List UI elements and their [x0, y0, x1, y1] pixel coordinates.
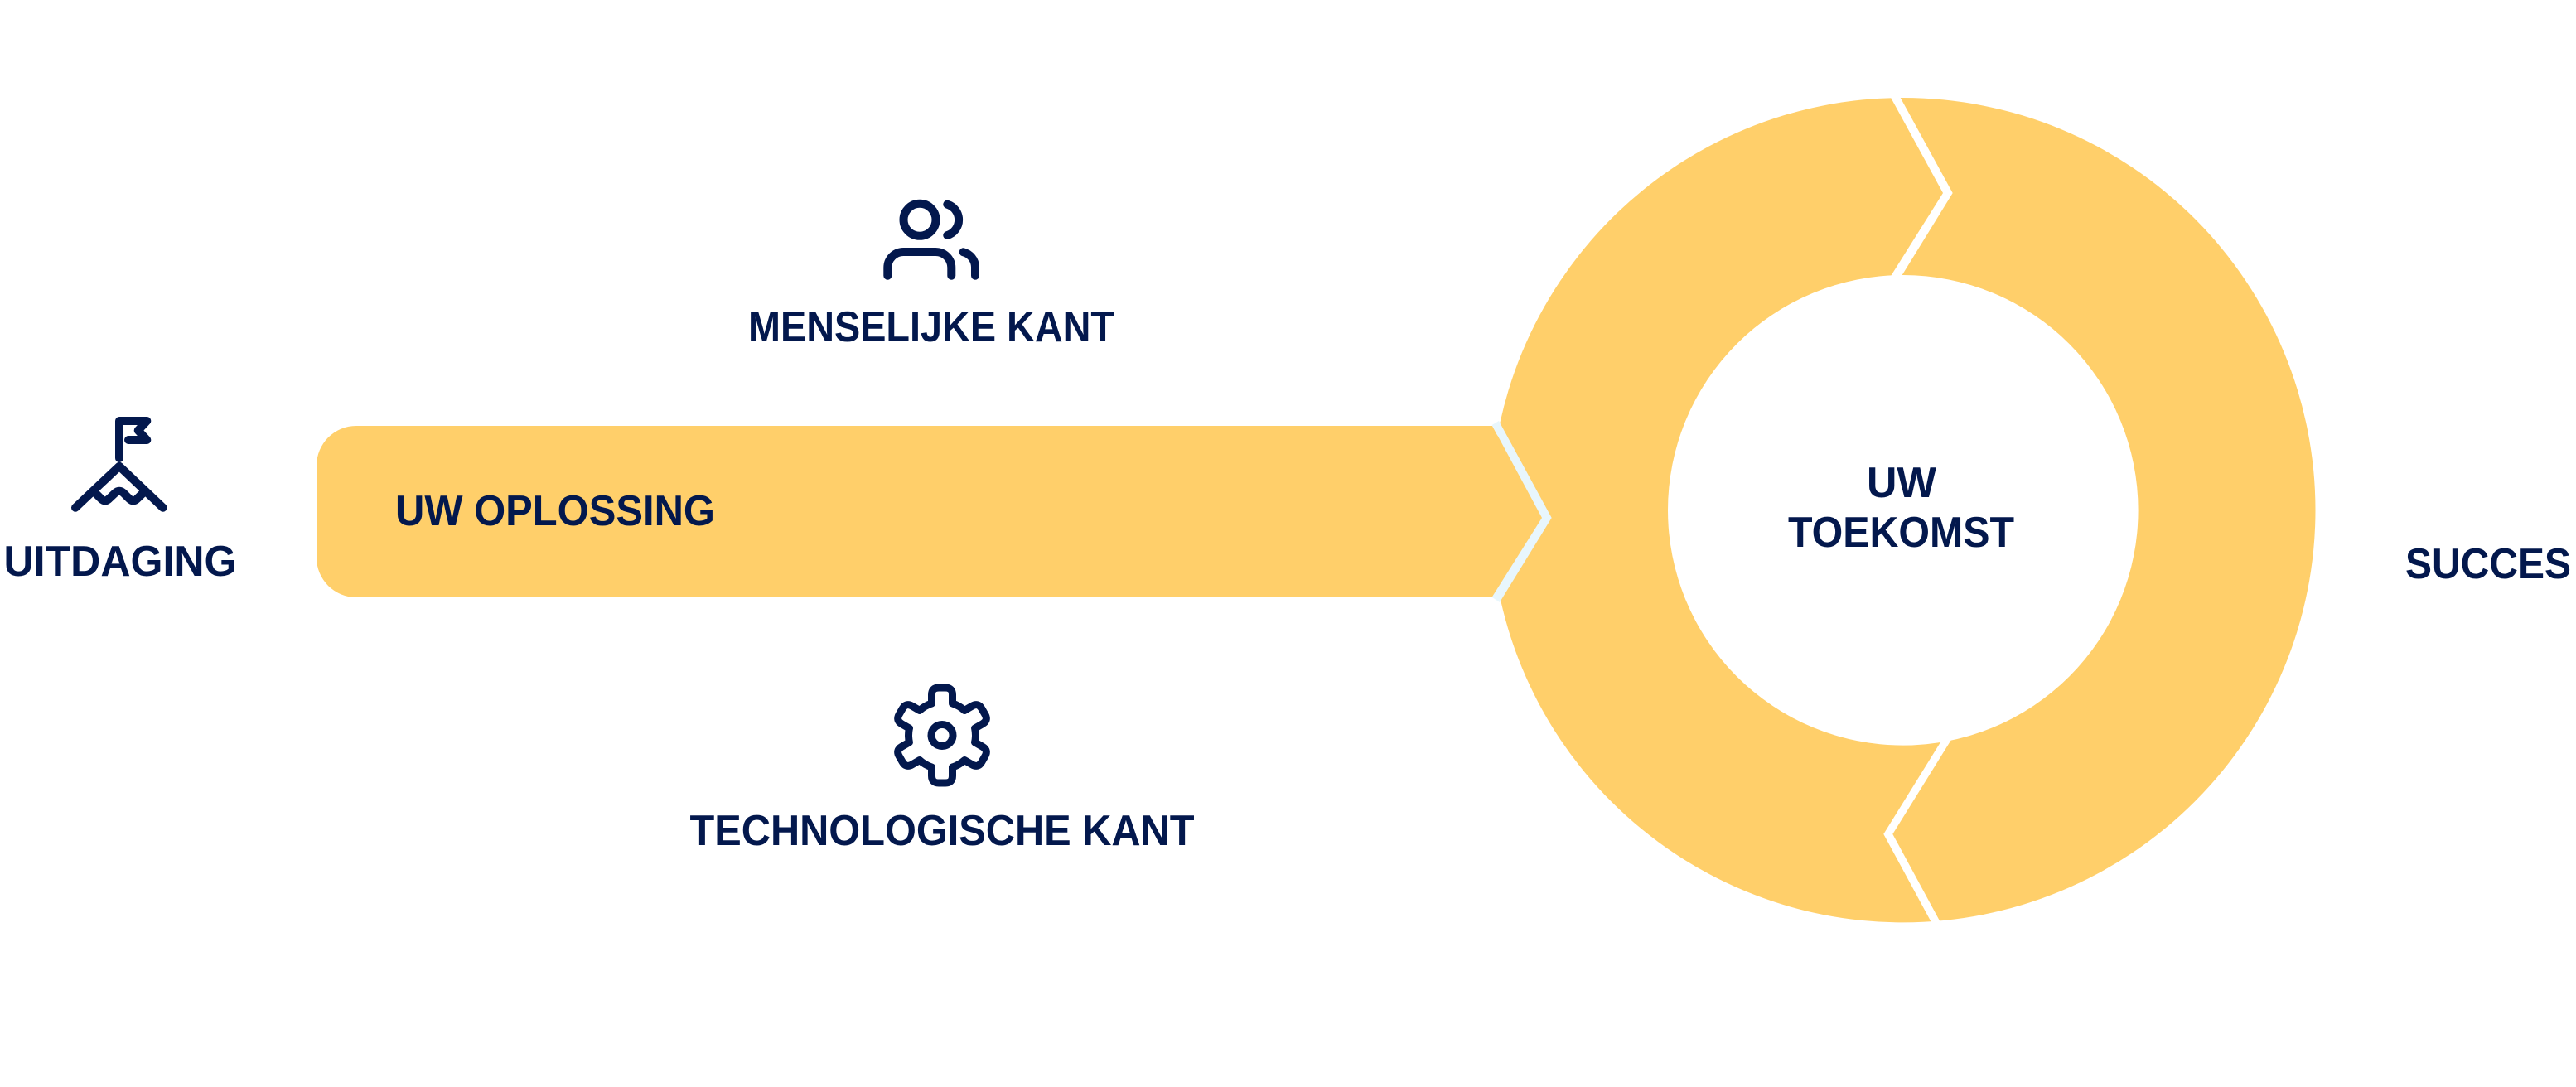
panel: future ring	[1491, 94, 2316, 925]
label: uitdaging: UITDAGING	[3, 538, 237, 586]
panel: solution arrow bar	[317, 426, 1542, 597]
heading: uw oplossing: UW OPLOSSING	[395, 487, 715, 535]
label: menselijke kant: MENSELIJKE KANT	[748, 303, 1114, 351]
heading: uw toekomst: TOEKOMST	[1788, 509, 2014, 557]
heading: uw toekomst	[1788, 459, 2014, 557]
icon: mountain with flag	[75, 421, 163, 508]
icon: people	[887, 204, 975, 276]
heading: uw toekomst: UW	[1867, 459, 1937, 507]
arrow: chevron divider	[1492, 421, 1552, 602]
label: technologische kant: TECHNOLOGISCHE KANT	[689, 807, 1195, 855]
icon: gear	[890, 688, 994, 783]
